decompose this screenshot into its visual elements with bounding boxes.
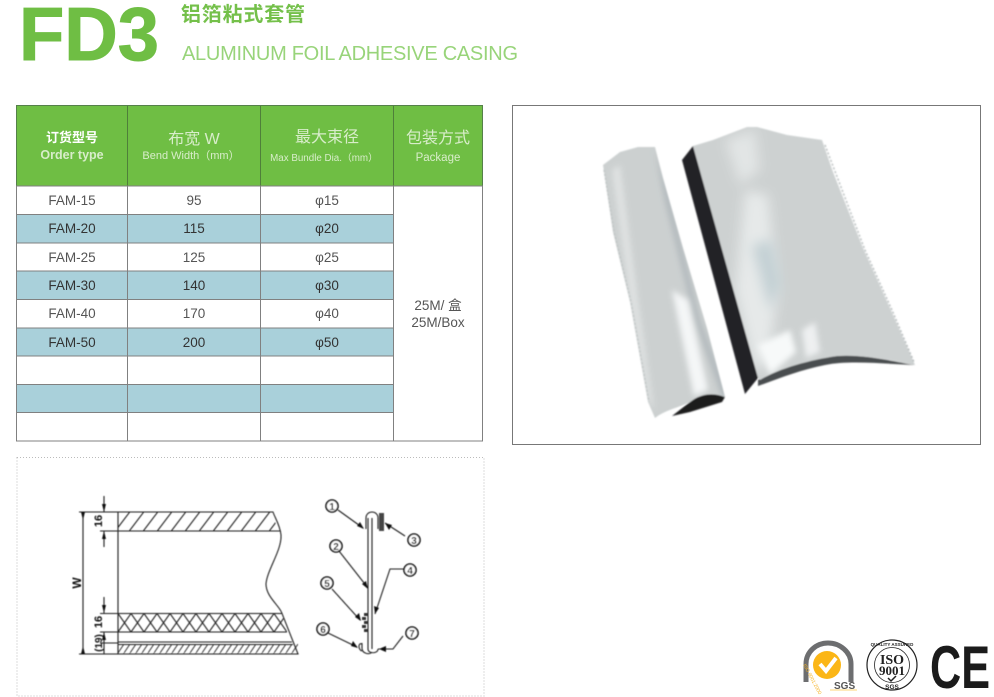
row FAM-50: FAM-50 [48, 335, 96, 350]
callout 4: 4 [407, 566, 413, 577]
callout 4 [404, 564, 416, 577]
header: max bundle diameter [270, 128, 378, 164]
callout 6: 6 [320, 625, 326, 636]
row FAM-30 [48, 278, 339, 293]
specification table [16, 106, 482, 441]
header: order type [40, 130, 104, 162]
photo: narrow rolled sleeve [603, 147, 730, 418]
callout 7: 7 [409, 629, 415, 640]
callout 1: 1 [329, 502, 335, 513]
row FAM-40: φ40 [315, 306, 339, 321]
row FAM-25: φ25 [315, 250, 339, 265]
row FAM-30: FAM-30 [48, 278, 96, 293]
panel: product photo [512, 106, 980, 444]
row FAM-15: 95 [186, 193, 202, 208]
row FAM-25: 125 [183, 250, 205, 265]
header: package: 包装方式 [406, 129, 470, 147]
header: package [406, 129, 470, 164]
header: max bundle diameter: Max Bundle Dia.（mm） [270, 152, 378, 164]
header: package: Package [416, 152, 460, 164]
title: English heading: ALUMINUM FOIL ADHESIVE CASING [182, 43, 518, 65]
icon: SGS certification badge: ISO 9001:2000 [801, 663, 822, 696]
icon: ISO 9001 badge: QUALITY ASSURED [871, 642, 914, 647]
row FAM-15: FAM-15 [48, 193, 96, 208]
callout 2 [330, 540, 342, 553]
row FAM-25 [48, 250, 339, 265]
table header row [16, 106, 482, 186]
package cell: 25M/Box [411, 315, 465, 330]
dimension label: 19: (19) [94, 634, 105, 652]
row FAM-15: φ15 [315, 193, 339, 208]
row FAM-20: FAM-20 [48, 221, 96, 236]
panel: technical drawings [17, 458, 484, 696]
icon: SGS certification badge: SGS [834, 681, 855, 692]
dimension label: W: W [70, 577, 84, 589]
icon: ISO 9001 badge: 9001 [879, 663, 905, 678]
table body [16, 186, 482, 441]
row FAM-15 [48, 193, 339, 208]
icon: ISO 9001 badge [867, 640, 917, 691]
row FAM-40 [48, 306, 339, 321]
row FAM-40: FAM-40 [48, 306, 96, 321]
row FAM-30: φ30 [315, 278, 339, 293]
row FAM-20 [48, 221, 339, 236]
diagram: cross section with callouts [317, 500, 420, 654]
header: bend width: 布宽 W [168, 130, 221, 148]
row FAM-50: φ50 [315, 335, 339, 350]
row FAM-20: φ20 [315, 221, 339, 236]
row FAM-40: 170 [183, 306, 205, 321]
certification logos [801, 634, 990, 697]
row FAM-50: 200 [183, 335, 205, 350]
callout 1 [326, 500, 338, 513]
title: Chinese heading: 铝箔粘式套管 [181, 3, 305, 26]
diagram: sleeve dimensions [70, 496, 298, 654]
header: bend width: Bend Width（mm） [142, 149, 240, 162]
dimension label: 16 bottom: 16 [93, 616, 105, 628]
callout 3: 3 [411, 536, 417, 547]
row FAM-25: FAM-25 [48, 250, 96, 265]
dimension label: 16 top: 16 [93, 515, 105, 527]
row FAM-30: 140 [183, 278, 205, 293]
callout 5: 5 [324, 579, 330, 590]
package cell: 25M/ 盒 [414, 297, 462, 313]
icon: ISO 9001 badge: ISO [880, 653, 904, 668]
package cell [411, 297, 465, 330]
callout 6 [317, 623, 329, 636]
callout 3 [408, 534, 420, 547]
photo: open sleeve with velcro strip [682, 127, 915, 394]
header: order type: Order type [40, 148, 104, 162]
callout 7 [406, 627, 418, 640]
header: order type: 订货型号 [46, 130, 98, 145]
row FAM-20: 115 [183, 221, 205, 236]
icon: SGS certification badge [801, 643, 857, 696]
icon: ISO 9001 badge: SGS [885, 684, 900, 691]
row FAM-50 [48, 335, 339, 350]
callout 2: 2 [333, 542, 339, 553]
header: bend width [142, 130, 240, 162]
callout 5 [321, 577, 333, 590]
header: max bundle diameter: 最大束径 [295, 128, 359, 146]
